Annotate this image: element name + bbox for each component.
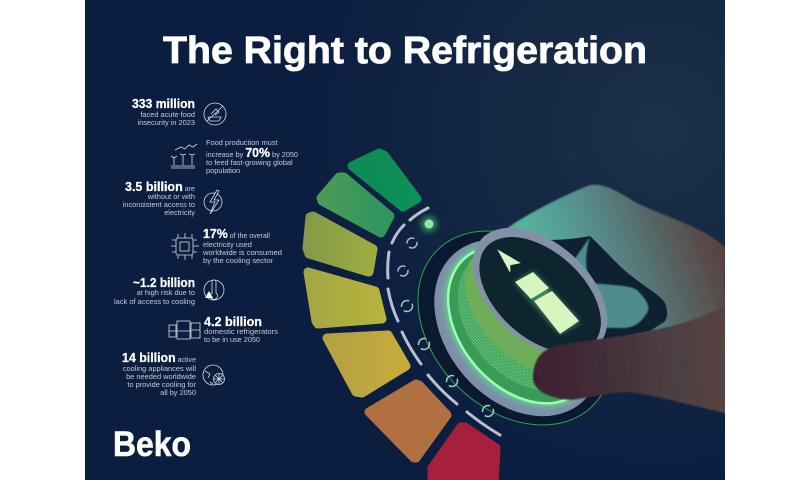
icon: arrow on dial — [498, 250, 520, 272]
icon: refrigerators — [169, 321, 200, 339]
segment: olive — [307, 216, 373, 272]
segment: yellow — [327, 335, 406, 393]
segment: red — [432, 427, 496, 480]
icon: refrigerator on dial — [515, 272, 580, 334]
stat: 3.5 billion: electricity — [164, 208, 195, 217]
stat: 4.2 billion: domestic refrigerators — [204, 327, 278, 336]
gauge: small indicator dials — [398, 238, 494, 416]
icon: thermometer warning — [204, 280, 224, 300]
stat: food production 70%: to feed fast-growing global — [206, 158, 293, 167]
dial: top face — [472, 228, 608, 352]
stat: 1.2 billion: lack of access to cooling — [114, 297, 195, 306]
stat: 14 billion: to provide cooling for — [127, 380, 197, 389]
stat: 14 billion: all by 2050 — [160, 388, 196, 397]
stat: 3.5 billion: inconsistent access to — [123, 200, 195, 209]
hand: gap between fingers — [550, 236, 668, 340]
stat: 333 million: faced acute food — [140, 110, 195, 119]
stat: 17%: electricity used — [203, 240, 252, 249]
stat: 17% — [202, 226, 282, 265]
outer page margin: right — [725, 0, 810, 480]
stat: food production 70%: Food production must — [206, 138, 277, 147]
stat: 17%: by the cooling sector — [203, 256, 274, 265]
stat: 1.2 billion: ~1.2 billion — [133, 275, 195, 290]
stat: 14 billion: cooling appliances will — [123, 364, 196, 373]
stat: 17%: worldwide is consumed — [202, 248, 282, 257]
gauge: colour segments — [307, 153, 496, 480]
stat: 1.2 billion: at high risk due to — [137, 288, 195, 297]
gauge: lit indicator — [421, 216, 437, 232]
hand: thumb — [533, 305, 725, 413]
dial: base plate — [418, 230, 602, 426]
stat: 333 million: 333 million — [132, 96, 195, 111]
gauge: white dashes — [388, 208, 500, 435]
segment: orange — [369, 384, 447, 458]
stat: 1.2 billion — [114, 275, 195, 306]
icon: globe with snowflake — [203, 365, 224, 385]
stat: food production 70%: population — [206, 166, 240, 175]
stat: food production 70%: increase by 70% by 2050 — [206, 146, 298, 160]
stat: 333 million — [132, 96, 195, 127]
segment: yellow-olive — [308, 272, 382, 324]
title: The Right to Refrigeration — [163, 30, 647, 72]
icon: growing plants — [171, 144, 197, 168]
background panel — [85, 0, 725, 480]
stat: 3.5 billion — [123, 179, 195, 217]
stat: 14 billion — [122, 350, 197, 397]
logo: Beko: Beko — [113, 425, 191, 464]
hand: back and fingers — [505, 185, 725, 413]
stat: 17%: 17% of the overall — [203, 226, 270, 241]
stat: 4.2 billion — [204, 314, 278, 344]
stat: food production 70% — [206, 138, 298, 175]
stat: 3.5 billion: without or with — [147, 192, 195, 201]
stat: 4.2 billion: to be in use 2050 — [204, 335, 260, 344]
hand: curled finger — [574, 237, 650, 329]
segment: green — [321, 177, 390, 233]
stat: 3.5 billion: 3.5 billion are — [125, 179, 195, 194]
stat: 333 million: insecurity in 2023 — [137, 118, 195, 127]
icon: food crossed out — [204, 103, 226, 125]
icon: cooling unit — [171, 233, 199, 260]
stat: 4.2 billion: 4.2 billion — [204, 314, 262, 329]
stat: 14 billion: be needed worldwide — [126, 372, 196, 381]
icon: lightning bolt — [204, 190, 222, 214]
stat: 14 billion: 14 billion active — [122, 350, 196, 365]
segment: dark green — [352, 153, 417, 207]
